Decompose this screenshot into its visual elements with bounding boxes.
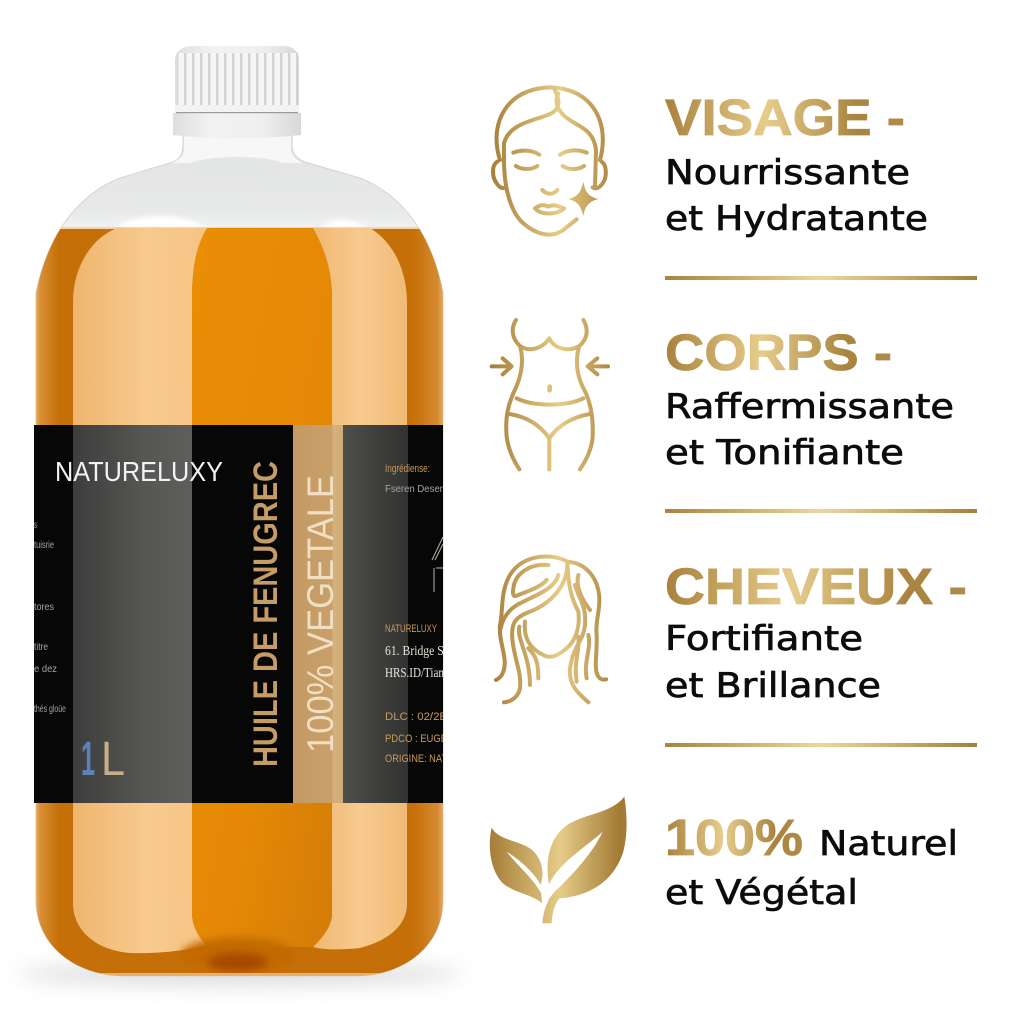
right small text: DLC : 02/2B <box>385 711 447 723</box>
left small text: tores <box>34 602 54 613</box>
volume: L <box>101 733 125 786</box>
right small text <box>385 463 447 765</box>
left small text <box>34 520 66 715</box>
left small text: e dez <box>34 664 57 675</box>
text: natural claim: 100% <box>665 809 803 866</box>
text: cheveux benefits <box>665 619 881 706</box>
text: corps benefits: et Tonifiante <box>665 433 904 473</box>
volume: 1 <box>81 733 95 786</box>
text: corps benefits <box>665 387 954 473</box>
product name: HUILE DE FENUGREC <box>247 461 285 767</box>
neck <box>172 134 303 177</box>
amber oil <box>34 216 446 978</box>
volume <box>81 733 125 786</box>
text: visage benefits <box>665 153 928 239</box>
heading: corps: CORPS - <box>665 324 892 381</box>
brand name: NATURELUXY <box>55 456 223 487</box>
text: natural claim: Naturel <box>819 824 958 864</box>
heading: visage: VISAGE - <box>665 89 905 146</box>
text: natural claim <box>665 809 958 913</box>
icon: face <box>493 87 606 235</box>
left small text: thés gloüe <box>34 704 66 715</box>
label <box>34 425 447 803</box>
icon: body <box>492 320 608 469</box>
left small text: titre <box>34 642 48 653</box>
text: cheveux benefits: Fortifiante <box>665 619 863 659</box>
bottle glass and milky shoulder <box>36 135 443 976</box>
icon: leaves <box>490 797 627 923</box>
left small text: tuisrie <box>34 540 54 551</box>
heading: cheveux: CHEVEUX - <box>665 558 967 615</box>
left small text: s <box>34 520 37 531</box>
text: cheveux benefits: et Brillance <box>665 666 881 706</box>
vegetal claim: 100% VEGETALE <box>300 475 341 753</box>
text: natural claim: et Végétal <box>665 873 858 913</box>
text: visage benefits: et Hydratante <box>665 199 928 239</box>
right small text: Fseren Desen <box>385 484 445 495</box>
icon: hair <box>496 557 606 702</box>
bottle shadow <box>18 964 462 984</box>
cap <box>173 46 301 138</box>
text: visage benefits: Nourrissante <box>665 153 910 193</box>
right small text: Ingrédiense: <box>385 463 430 475</box>
bottle <box>34 46 447 978</box>
text: corps benefits: Raffermissante <box>665 387 954 427</box>
